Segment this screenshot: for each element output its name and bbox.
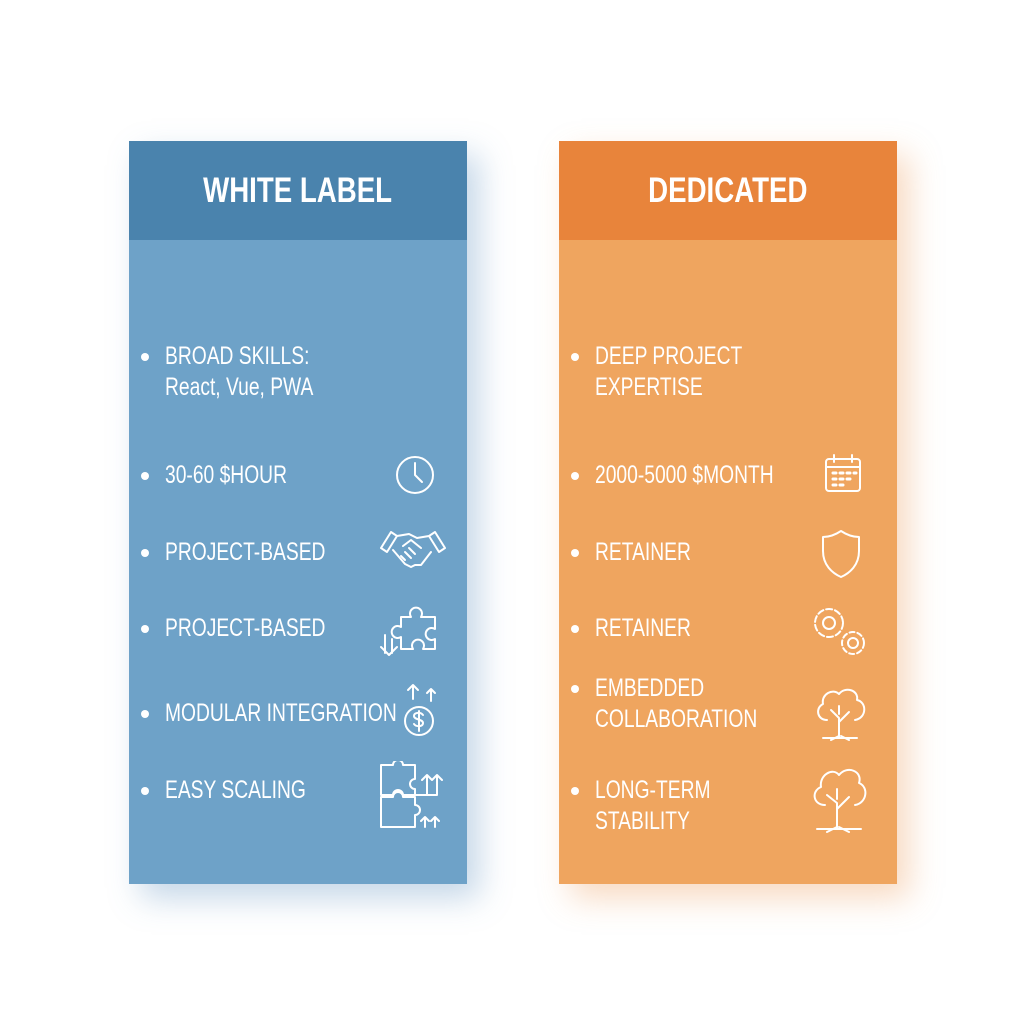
text: project-based 2: PROJECT-BASED <box>165 614 325 642</box>
text: long-term stability <box>595 775 745 837</box>
text: deep expertise: DEEP PROJECT <box>595 342 742 370</box>
heading: white label <box>129 141 467 240</box>
panel: dedicated <box>559 141 897 884</box>
text: easy scaling: EASY SCALING <box>165 776 306 804</box>
text: broad skills: BROAD SKILLS: <box>165 342 309 370</box>
icon: puzzle <box>380 606 436 656</box>
heading: dedicated: DEDICATED <box>648 170 808 210</box>
text: embedded collaboration <box>595 673 806 735</box>
text: broad skills: React, Vue, PWA <box>165 373 313 401</box>
text: embedded collaboration: COLLABORATION <box>595 705 757 733</box>
text: broad skills <box>165 341 358 403</box>
icon: tree 2 <box>814 768 866 833</box>
icon: dollar arrows <box>404 684 436 736</box>
text: rate: 30-60 $HOUR <box>165 461 287 489</box>
text: deep expertise: EXPERTISE <box>595 373 703 401</box>
text: retainer 2: RETAINER <box>595 614 691 642</box>
icon: tree <box>817 688 866 741</box>
text: deep expertise <box>595 341 786 403</box>
text: embedded collaboration: EMBEDDED <box>595 674 704 702</box>
text: long-term stability: STABILITY <box>595 807 690 835</box>
panel: white label <box>129 141 467 884</box>
heading: dedicated <box>559 141 897 240</box>
text: long-term stability: LONG-TERM <box>595 776 710 804</box>
icon: handshake <box>380 531 446 568</box>
text: monthly rate: 2000-5000 $MONTH <box>595 461 774 489</box>
text: modular integration: MODULAR INTEGRATION <box>165 699 397 727</box>
heading: white label: WHITE LABEL <box>204 170 392 210</box>
icon: puzzle scaling <box>380 761 443 828</box>
icon: gears <box>814 608 865 655</box>
icon: shield <box>822 530 860 578</box>
text: retainer: RETAINER <box>595 538 691 566</box>
icon: clock <box>396 456 434 494</box>
icon: calendar <box>825 454 861 492</box>
text: project-based: PROJECT-BASED <box>165 538 325 566</box>
